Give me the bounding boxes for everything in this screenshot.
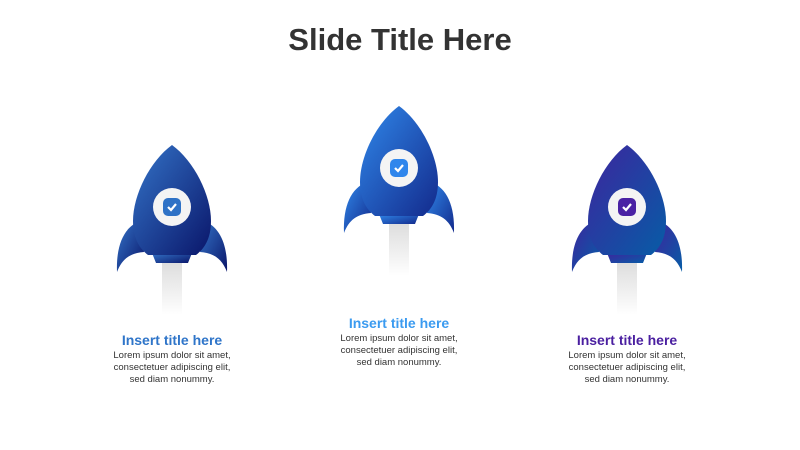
text block 2: Insert title here [349,315,449,331]
text block 3: sed diam nonummy. [585,374,669,385]
text block 1: sed diam nonummy. [130,374,214,385]
text block 1: Insert title here [122,332,222,348]
text block 3: Lorem ipsum dolor sit amet, [568,350,686,361]
text block 2: Lorem ipsum dolor sit amet, [340,333,458,344]
rocket 3 [572,145,682,315]
rocket 1 [117,145,227,315]
text block 1 [113,332,231,385]
text block 1: consectetuer adipiscing elit, [114,362,230,373]
text block 2: sed diam nonummy. [357,357,441,368]
text block 3 [568,332,686,385]
rocket 2 [344,106,454,276]
title: Slide Title Here [288,22,512,57]
text block 3: Insert title here [577,332,677,348]
text block 3: consectetuer adipiscing elit, [569,362,685,373]
text block 2 [340,315,458,368]
text block 1: Lorem ipsum dolor sit amet, [113,350,231,361]
text block 2: consectetuer adipiscing elit, [341,345,457,356]
